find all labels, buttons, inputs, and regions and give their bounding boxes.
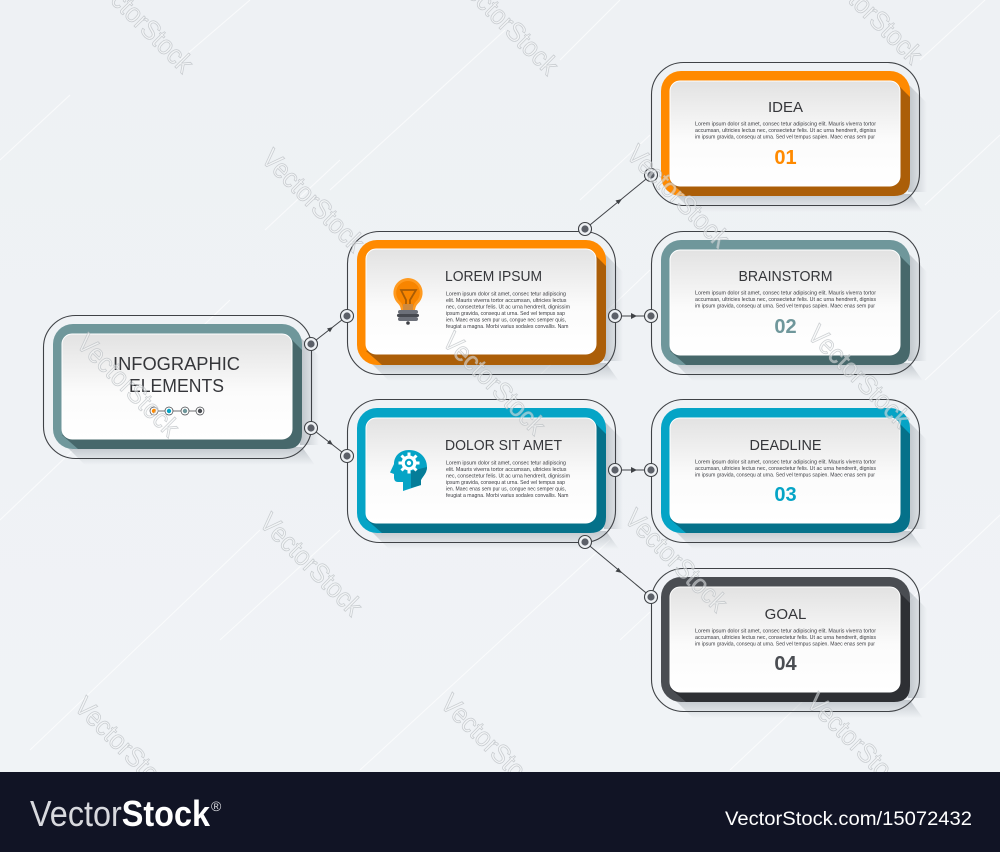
text block: deadline: accumsan, ultricies lectus nec, consectetur felis. Ut ac urna hendrerit, digniss [695,466,876,472]
text block: brainstorm: accumsan, ultricies lectus nec, consectetur felis. Ut ac urna hendrerit, digniss [695,297,876,303]
text block: deadline [695,460,876,478]
main heading: INFOGRAPHIC [113,354,240,374]
heading: idea: IDEA [768,99,803,116]
text block: lorem ipsum: ien. Maec enas sem pur us, congue nec semper quis, [446,318,566,324]
text block: goal: accumsan, ultricies lectus nec, consectetur felis. Ut ac urna hendrerit, digniss [695,635,876,641]
step dots [150,407,204,415]
panel: deadline [652,400,927,549]
text block: lorem ipsum: elit. Mauris viverra tortor accumsan, ultricies lectus [446,298,567,304]
panel: dolor sit amet [348,400,623,549]
icon: head with gear [390,450,427,491]
text block: deadline: Lorem ipsum dolor sit amet, consec tetur adipiscing elit. Mauris viverra tortor [695,460,876,466]
main heading: ELEMENTS [129,376,224,396]
heading: goal: GOAL [765,606,806,623]
arrow: lorem ipsum to brainstorm [615,313,651,319]
connector nodes [304,168,658,604]
text block: lorem ipsum [446,292,570,330]
watermarks: VectorStock [435,688,550,803]
panel: infographic elements [44,316,319,465]
text block: idea: im ipsum gravida, consequ at urna. Sed vel tempus sapien. Maec enas sem pur [695,134,875,140]
registered mark: ® [211,798,222,814]
watermarks: VectorStock [437,326,552,441]
arrow: main to dolor sit amet [311,428,347,456]
watermarks: VectorStock [69,691,184,806]
watermarks: VectorStock [802,319,917,434]
number 04: 04 [774,653,797,675]
text block: dolor sit amet: nec, consectetur felis. Ut ac urna hendrerit, dignissim [446,474,570,480]
heading: dolor sit amet: DOLOR SIT AMET [445,437,562,454]
panel: goal [652,568,927,718]
heading: lorem ipsum: LOREM IPSUM [445,268,542,285]
footer logo: VectorStock [30,793,211,834]
text block: goal: im ipsum gravida, consequ at urna. Sed vel tempus sapien. Maec enas sem pur [695,642,875,648]
number 02: 02 [774,316,797,338]
icon: light bulb [393,278,423,325]
watermarks: VectorStock [254,507,369,622]
arrow: dolor to deadline [615,467,651,473]
number 01: 01 [774,147,797,169]
text block: dolor sit amet: Lorem ipsum dolor sit amet, consec tetur adipiscing [446,460,566,466]
text block: goal: Lorem ipsum dolor sit amet, consec tetur adipiscing elit. Mauris viverra tortor [695,628,876,634]
watermarks: VectorStock [621,139,736,254]
panel: idea [652,62,927,212]
text block: brainstorm [695,290,876,310]
text block: deadline: im ipsum gravida, consequ at urna. Sed vel tempus sapien. Maec enas sem pur [695,472,875,478]
text block: lorem ipsum: feugiat a magna. Morbi varius sodales convallis. Nam [446,324,569,330]
text block: goal [695,628,876,648]
heading: brainstorm: BRAINSTORM [738,268,832,285]
text block: lorem ipsum: nec, consectetur felis. Ut ac urna hendrerit, dignissim [446,304,570,310]
connector arrows [311,175,651,597]
arrow: lorem ipsum to idea [585,175,651,229]
text block: lorem ipsum: Lorem ipsum dolor sit amet, consec tetur adipiscing [446,292,566,298]
text block: dolor sit amet [446,460,570,499]
watermarks: VectorStock [801,687,916,802]
main heading [113,354,240,396]
arrow: main to lorem ipsum [311,316,347,344]
text block: brainstorm: Lorem ipsum dolor sit amet, consec tetur adipiscing elit. Mauris viverra tortor [695,290,876,296]
text block: idea: accumsan, ultricies lectus nec, consectetur felis. Ut ac urna hendrerit, digniss [695,128,876,134]
text block: idea [695,122,876,140]
text block: dolor sit amet: ien. Maec enas sem pur us, congue nec semper quis, [446,486,566,492]
text block: lorem ipsum: ipsum gravida, consequ at urna. Sed vel tempus sap [446,311,565,317]
panel: brainstorm [652,232,927,381]
text block: idea: Lorem ipsum dolor sit amet, consec tetur adipiscing elit. Mauris viverra tortor [695,122,876,128]
watermarks: VectorStock [71,328,186,443]
text block: brainstorm: im ipsum gravida, consequ at urna. Sed vel tempus sapien. Maec enas sem pur [695,304,875,310]
text block: dolor sit amet: elit. Mauris viverra tortor accumsan, ultricies lectus [446,467,567,473]
arrow: dolor to goal [585,542,651,597]
watermarks: VectorStock [619,503,734,618]
footer image id: VectorStock.com/15072432 [725,809,972,830]
number 03: 03 [774,484,797,506]
text block: dolor sit amet: feugiat a magna. Morbi varius sodales convallis. Nam [446,493,569,499]
footer bar [0,772,1000,852]
heading: deadline: DEADLINE [750,437,822,454]
panel: lorem ipsum [348,232,623,381]
text block: dolor sit amet: ipsum gravida, consequ at urna. Sed vel tempus sap [446,480,565,486]
watermarks: VectorStock [256,143,371,258]
